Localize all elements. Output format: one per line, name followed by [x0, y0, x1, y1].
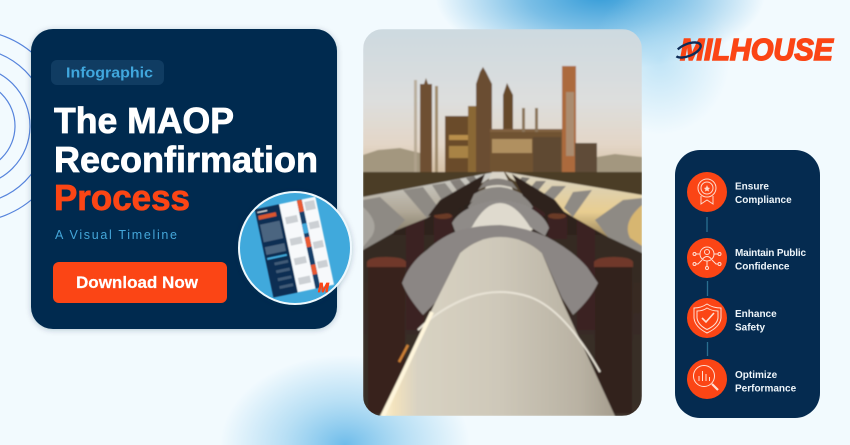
title: The MAOP: [54, 100, 234, 141]
icon: connected person: [693, 247, 721, 270]
thumbnail: infographic preview: [239, 192, 351, 304]
rear posts: [406, 206, 595, 305]
badge: Infographic: [51, 60, 164, 85]
item: Ensure Compliance: Compliance: [735, 195, 792, 206]
icon: magnifier chart: [694, 366, 718, 390]
main centre pipe: [380, 237, 615, 416]
badge: Infographic: Infographic: [66, 64, 153, 82]
decorative concentric circles: [0, 30, 66, 222]
title: Reconfirmation: [54, 139, 318, 180]
foreground posts: [367, 257, 633, 413]
item: Enhance Safety: Safety: [735, 322, 765, 334]
panel: main call to action: [31, 29, 337, 329]
photo: pipeline leading to refinery: [363, 29, 642, 416]
item: Optimize Performance: [687, 359, 797, 399]
item: Maintain Public Confidence: [687, 238, 806, 278]
right pipeline row: [505, 172, 642, 253]
logo: Milhouse: MILHOUSE: [680, 32, 834, 67]
refinery: [414, 66, 597, 173]
logo swoosh: [673, 39, 703, 61]
ground band: [363, 172, 642, 199]
connector lines: [706, 217, 708, 356]
main flange: [402, 225, 598, 315]
title: [54, 100, 318, 218]
button: Download Now: Download Now: [76, 273, 199, 292]
button: Download Now: [53, 262, 227, 303]
pipe edge highlight: [383, 312, 432, 416]
item: Enhance Safety: Enhance: [735, 309, 777, 320]
item: Maintain Public Confidence: Maintain Public: [735, 248, 806, 259]
inner dark wedges: [428, 174, 566, 216]
item: Optimize Performance: Performance: [735, 384, 797, 394]
item: Ensure Compliance: Ensure: [735, 182, 769, 192]
panel: benefits: [675, 150, 820, 418]
weld seam: [418, 292, 600, 372]
title: Process: [54, 177, 190, 218]
second flange: [451, 206, 550, 236]
floor tint: [364, 246, 632, 253]
left pipeline row: [363, 172, 495, 250]
centre pipe far segments: [468, 172, 533, 230]
sun flare: [399, 345, 408, 362]
item: Enhance Safety: [687, 298, 777, 338]
subtitle: A Visual Timeline: [55, 228, 177, 242]
item: Optimize Performance: Optimize: [735, 370, 778, 381]
icon: shield check: [694, 304, 721, 333]
thumbnail: infographic preview: M: [318, 280, 330, 295]
icon: award ribbon: [698, 179, 716, 204]
item: Maintain Public Confidence: Confidence: [735, 262, 790, 272]
item: Ensure Compliance: [687, 172, 792, 212]
distant hills: [363, 148, 642, 173]
